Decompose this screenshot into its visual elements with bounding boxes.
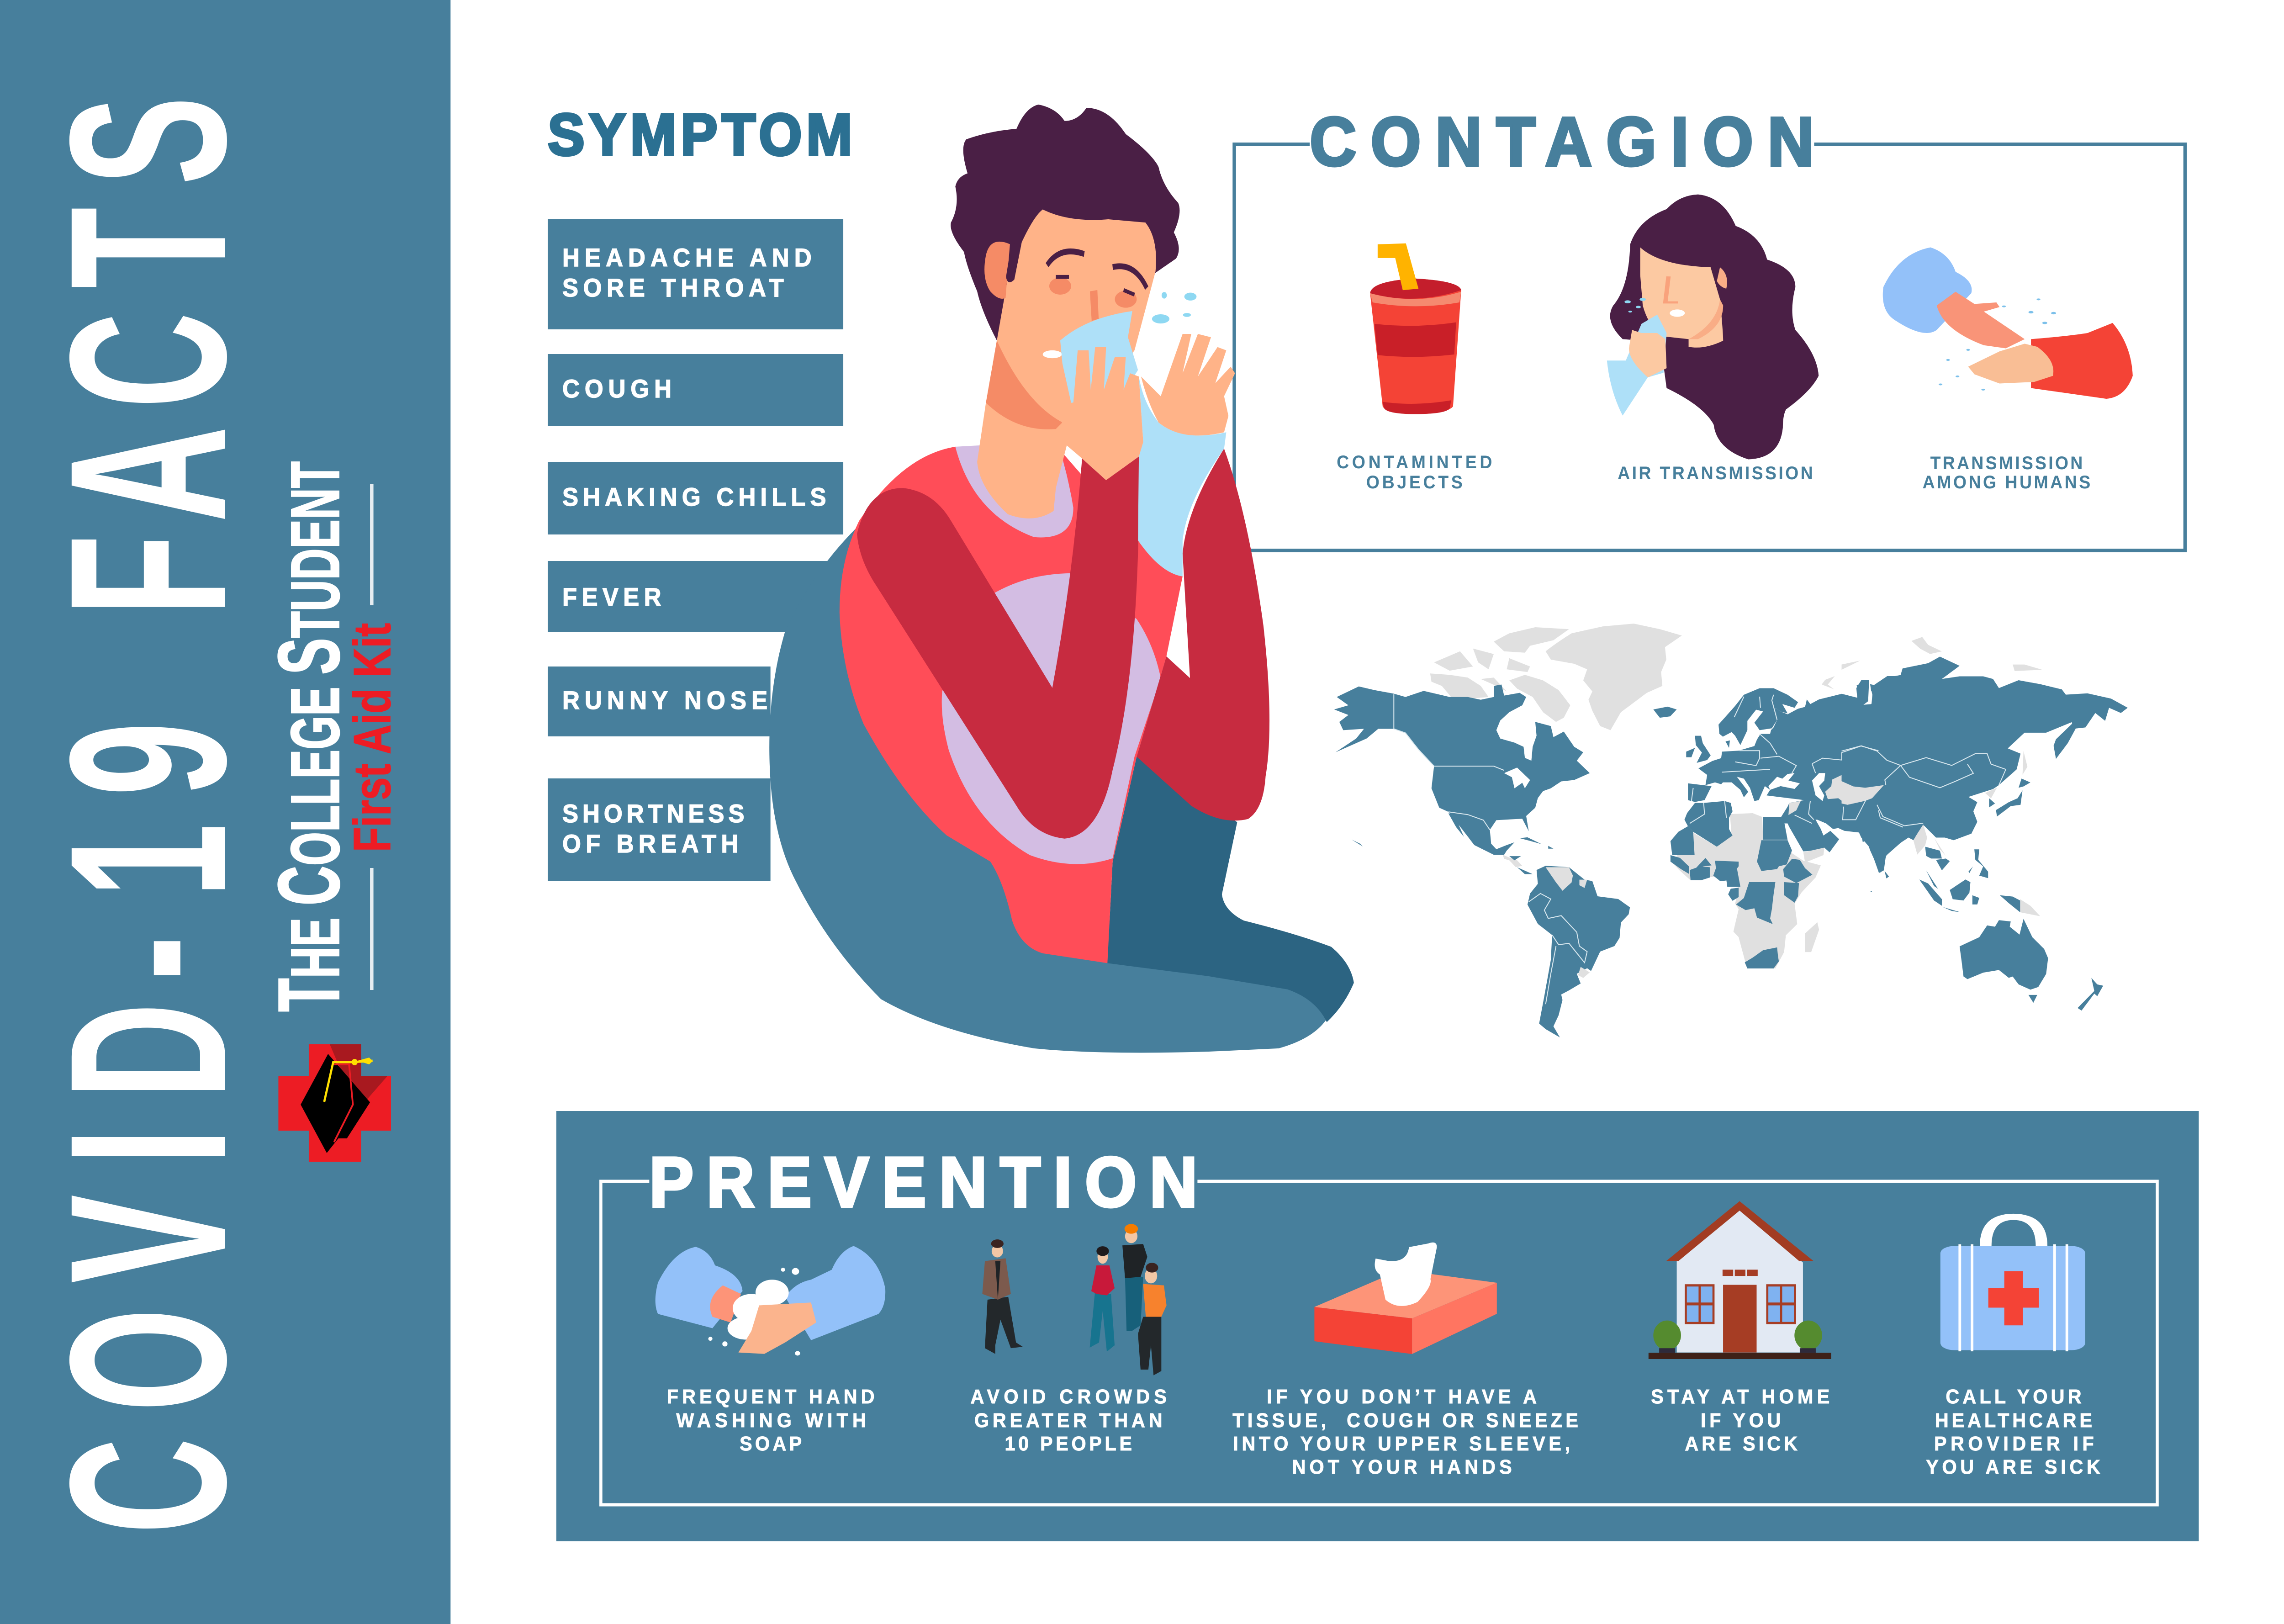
label: cough into sleeve: IF YOU DON’T HAVE A [1267, 1386, 1537, 1408]
label: cough into sleeve: INTO YOUR UPPER SLEEVE, [1233, 1433, 1570, 1455]
label: hand washing [667, 1386, 874, 1455]
label: hand washing: FREQUENT HAND [667, 1386, 874, 1408]
contagion labels: OBJECTS [1366, 472, 1463, 492]
symptom labels: SHORTNESS [562, 799, 744, 828]
label: stay at home: IF YOU [1701, 1409, 1781, 1432]
person: woman in red [1090, 1246, 1115, 1352]
icon: contaminated cup [1370, 243, 1461, 414]
label: avoid crowds [971, 1386, 1167, 1455]
contagion labels: TRANSMISSION [1930, 453, 2083, 473]
label: call provider [1926, 1386, 2100, 1478]
label: call provider: HEALTHCARE [1935, 1409, 2092, 1432]
label: hand washing: SOAP [740, 1433, 802, 1455]
map: Americas, Greenland and Arctic [1334, 624, 1682, 1037]
map: Europe, Africa and western Asia [1671, 676, 1936, 968]
symptom labels [562, 243, 826, 858]
contagion labels: CONTAMINTED [1337, 452, 1492, 472]
label: stay at home: STAY AT HOME [1651, 1386, 1829, 1408]
panel: prevention [556, 1111, 2199, 1541]
person: lone man [982, 1239, 1023, 1354]
contagion labels: AMONG HUMANS [1923, 472, 2090, 492]
label: call provider: PROVIDER IF [1934, 1433, 2094, 1455]
map: country borders in Europe, Africa and western Asia [1690, 695, 1903, 827]
panel: left sidebar [0, 0, 450, 1624]
symptom labels: COUGH [562, 374, 671, 403]
icon: house [1649, 1201, 1831, 1359]
label: avoid crowds: 10 PEOPLE [1005, 1433, 1132, 1455]
symptom labels: SHAKING CHILLS [562, 482, 826, 511]
heading: PREVENTION: PREVENTION [649, 1143, 1197, 1222]
title: COVID-19 FACTS: COVID-19 FACTS [23, 96, 273, 1534]
label: avoid crowds: AVOID CROWDS [971, 1386, 1167, 1408]
label: cough into sleeve [1232, 1386, 1578, 1478]
symptom labels: RUNNY NOSE [562, 686, 767, 714]
label: stay at home [1651, 1386, 1829, 1455]
symptom labels: SORE THROAT [562, 273, 784, 302]
icon: hands transmission [1883, 247, 2133, 399]
label: call provider: CALL YOUR [1946, 1386, 2082, 1408]
chart: world map of affected countries [1334, 624, 2128, 1037]
brand name: The College Student: THE COLLEGE STUDENT [260, 461, 357, 1012]
label: call provider: YOU ARE SICK [1926, 1456, 2100, 1478]
prevention labels [667, 1386, 2100, 1478]
label: avoid crowds: GREATER THAN [974, 1409, 1163, 1432]
icon: sneezing woman [1607, 195, 1819, 460]
icon: first aid kit [1940, 1217, 2085, 1351]
icon: hand washing [656, 1246, 885, 1356]
symptom labels: HEADACHE AND [562, 243, 812, 272]
heading: CONTAGION: CONTAGION [1310, 104, 1814, 180]
symptom labels: FEVER [562, 582, 661, 611]
label: cough into sleeve: TISSUE, COUGH OR SNEEZE [1232, 1409, 1578, 1432]
brand tagline: First Aid Kit: First Aid Kit [344, 623, 402, 852]
person: tall man [1122, 1224, 1147, 1331]
label: stay at home: ARE SICK [1685, 1433, 1798, 1455]
heading: SYMPTOM: SYMPTOM [548, 102, 852, 168]
label: hand washing: WASHING WITH [676, 1409, 866, 1432]
symptom labels: OF BREATH [562, 829, 738, 858]
map: eastern Asia and Oceania [1842, 637, 2128, 1010]
illustration: sick man blowing nose [769, 105, 1354, 1053]
panel: contagion [1234, 104, 2185, 550]
contagion labels: AIR TRANSMISSION [1618, 463, 1813, 483]
contagion labels [1337, 452, 2090, 492]
icon: tissue box [1314, 1243, 1497, 1354]
person: bearded man [1138, 1263, 1167, 1375]
label: cough into sleeve: NOT YOUR HANDS [1292, 1456, 1512, 1478]
icon: group of people [982, 1224, 1167, 1375]
panel: symptom list [548, 219, 843, 881]
icon: logo cross with graduation cap [278, 1044, 391, 1162]
